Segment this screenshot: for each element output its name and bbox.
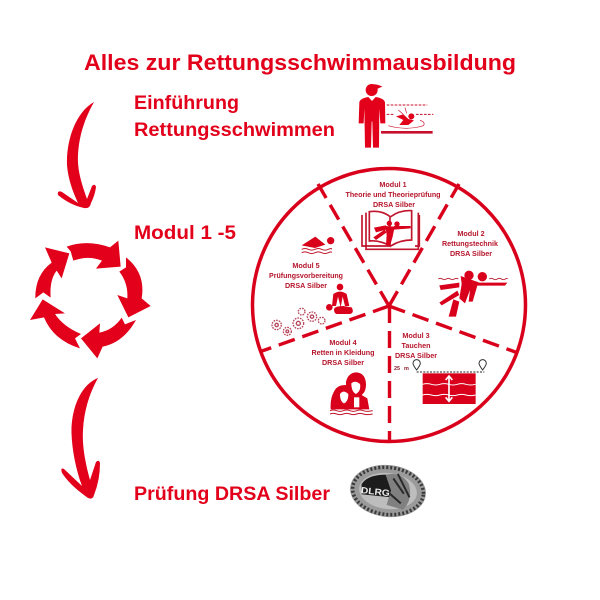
text: Modul 3: 25 xyxy=(394,366,400,372)
text: Modul 4: Retten in Kleidung xyxy=(312,348,374,357)
text: Modul 3: m xyxy=(404,366,409,372)
icon: cycle of five arrows xyxy=(30,241,151,358)
text: Modul 5: DRSA Silber xyxy=(285,281,327,290)
arrow: top curved arrow xyxy=(58,102,96,208)
text: Modul 1: Modul 1 xyxy=(379,180,407,189)
heading: Modul 1-5: Modul 1 -5 xyxy=(134,223,236,244)
icon: 25 m dive pool xyxy=(413,360,486,404)
text: Modul 2: Modul 2 xyxy=(457,229,485,238)
icon: swimmer xyxy=(302,237,334,253)
icon: DLRG silver badge: DLRG xyxy=(360,485,390,498)
title: Alles zur Rettungsschwimmausbildung xyxy=(84,50,516,75)
heading: Einführung Rettungsschwimmen: Rettungsschwimmen xyxy=(134,120,335,141)
icon: rescue tow swimmers xyxy=(438,271,507,317)
chart: module wheel xyxy=(252,168,526,442)
text: Modul 2: Rettungstechnik xyxy=(442,239,498,248)
text: Modul 2: DRSA Silber xyxy=(450,249,492,258)
text: Modul 5: Modul 5 xyxy=(292,261,320,270)
text: Modul 4: DRSA Silber xyxy=(322,358,364,367)
heading: Einführung Rettungsschwimmen: Einführung xyxy=(134,93,239,114)
text: Modul 1: DRSA Silber xyxy=(373,200,415,209)
icon: CPR xyxy=(326,284,353,314)
icon: DLRG silver badge xyxy=(347,461,429,521)
text: Modul 1: Theorie und Theorieprüfung xyxy=(346,190,440,199)
arrow: bottom curved arrow xyxy=(61,378,100,499)
text: Modul 1 xyxy=(346,180,440,209)
icon: gears xyxy=(272,308,325,335)
text: Modul 5 xyxy=(269,261,343,290)
text: Modul 3: Modul 3 xyxy=(402,331,430,340)
icon: rescuer with person in clothes xyxy=(330,372,373,415)
heading: Prüfung DRSA Silber: Prüfung DRSA Silber xyxy=(134,484,331,505)
heading: Einführung Rettungsschwimmen xyxy=(134,93,335,141)
text: Modul 3: Tauchen xyxy=(401,341,431,350)
text: Modul 5: Prüfungsvorbereitung xyxy=(269,271,343,280)
text: Modul 2 xyxy=(442,229,498,258)
icon: lifeguard watching swimmer xyxy=(359,84,433,148)
text: Modul 3: DRSA Silber xyxy=(395,351,437,360)
text: Modul 4 xyxy=(312,338,374,367)
text: Modul 4: Modul 4 xyxy=(329,338,357,347)
text: Modul 3 xyxy=(394,331,437,372)
icon: book with rescuers xyxy=(362,211,419,249)
